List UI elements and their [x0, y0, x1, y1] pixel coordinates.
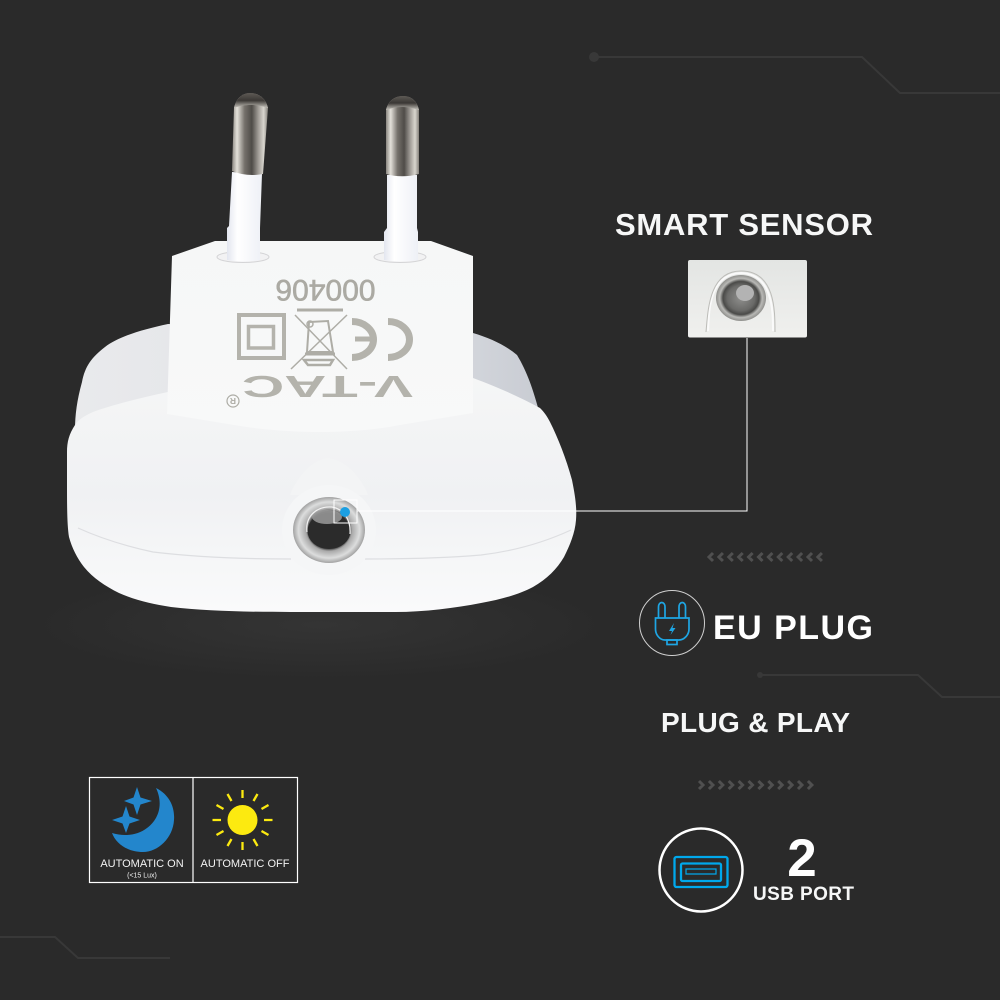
sensor detail photo — [688, 260, 807, 338]
icon: usb port — [660, 828, 742, 912]
sensor housing — [282, 458, 376, 575]
usb count: 2 — [787, 829, 817, 888]
brand logo: V-TAC — [242, 369, 413, 404]
CE mark — [352, 322, 409, 358]
automatic off label: AUTOMATIC OFF — [200, 858, 290, 870]
icon: moon and stars — [112, 787, 174, 852]
sensor modes box — [90, 778, 298, 882]
registered mark — [227, 395, 239, 407]
registered mark: R — [230, 396, 236, 406]
lux note: (<15 Lux) — [127, 872, 157, 880]
callout line: sensor to detail — [334, 338, 747, 523]
heading: plug and play: PLUG & PLAY — [661, 707, 850, 738]
front body — [67, 378, 576, 612]
heading: smart sensor: SMART SENSOR — [615, 207, 873, 242]
chevrons: left pointing — [709, 553, 822, 561]
icon: sun — [212, 790, 272, 850]
right pin — [384, 96, 419, 262]
model number: 000406 — [275, 273, 376, 306]
pin holes — [217, 252, 426, 262]
rear body — [75, 324, 540, 430]
usb label: USB PORT — [753, 884, 854, 905]
product: night light plug — [67, 93, 576, 612]
chevrons: right pointing — [699, 781, 812, 789]
seam line — [78, 528, 571, 559]
plug block — [167, 241, 473, 432]
WEEE mark — [291, 310, 347, 369]
icon: eu plug — [640, 590, 704, 656]
left pin — [227, 93, 268, 262]
automatic on label: AUTOMATIC ON — [100, 858, 184, 870]
sensor lens — [293, 497, 365, 563]
double insulation mark — [239, 315, 284, 358]
heading: eu plug: EU PLUG — [713, 609, 873, 647]
